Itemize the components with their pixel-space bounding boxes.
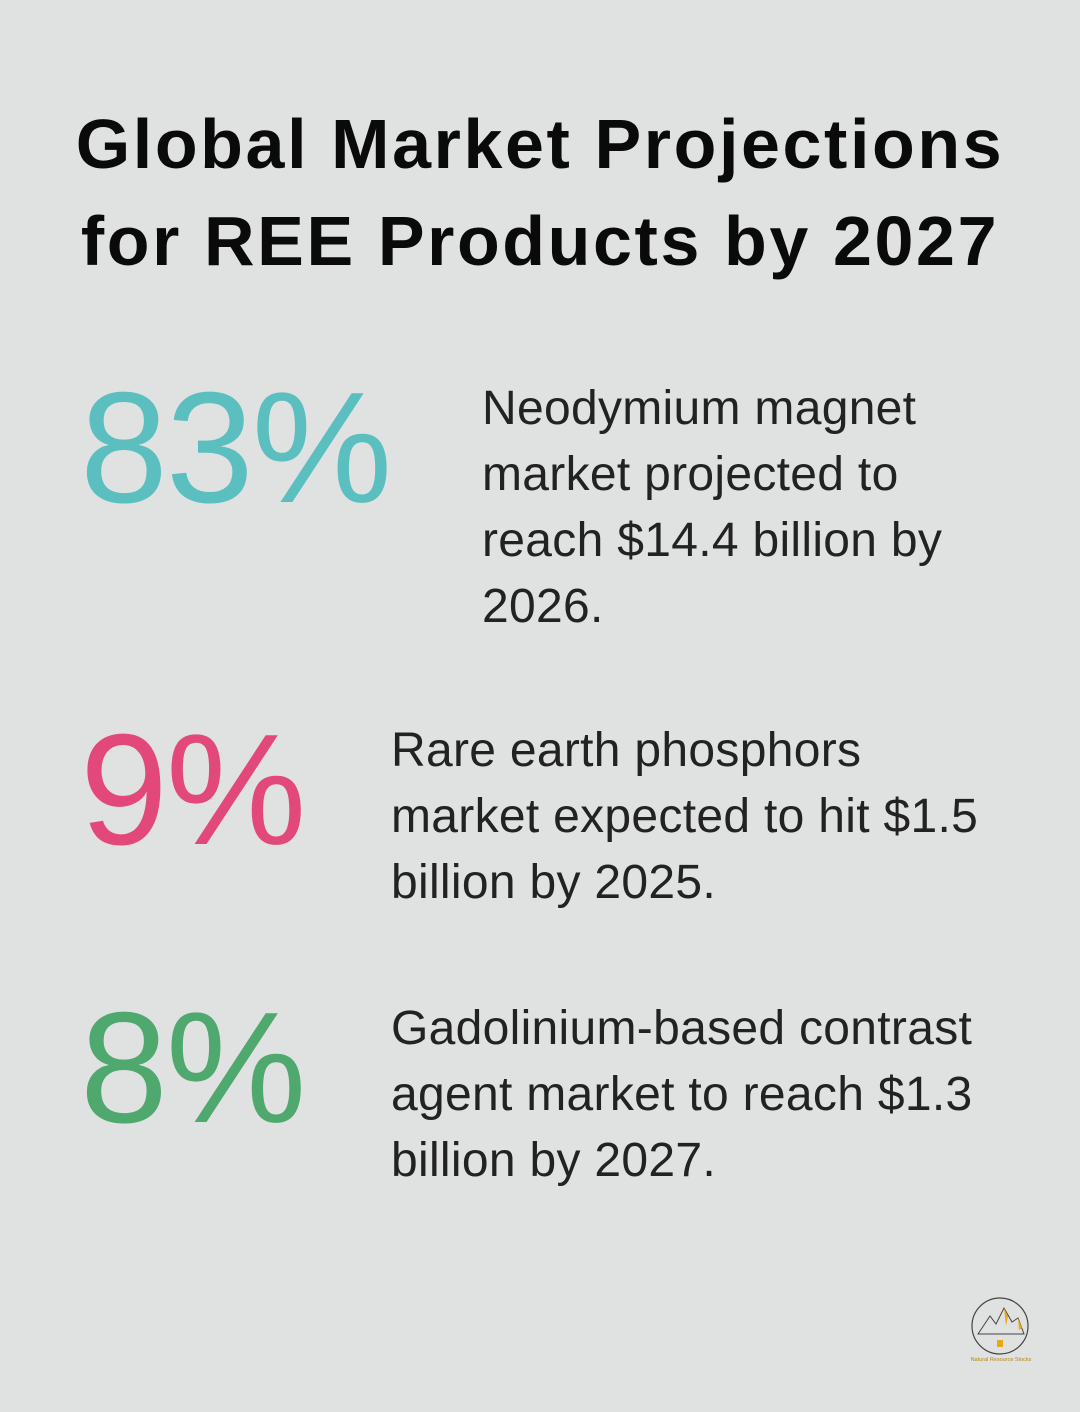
number 9%: 9% [80, 702, 304, 878]
description 3: Gadolinium-based contrast agent market to reach $1.3 billion by 2027. [391, 1002, 972, 1187]
stat 1 [80, 360, 942, 633]
logo [971, 1297, 1032, 1363]
stat 3 [80, 980, 972, 1187]
number 8%: 8% [80, 980, 304, 1156]
stat 2 [80, 702, 978, 909]
title: for REE Products by 2027 [81, 202, 999, 280]
title: Global Market Projections [76, 105, 1004, 183]
title [76, 105, 1004, 280]
description 1: Neodymium magnet market projected to reach $14.4 billion by 2026. [482, 382, 942, 633]
number 83%: 83% [80, 360, 390, 536]
description 2: Rare earth phosphors market expected to hit $1.5 billion by 2025. [391, 724, 978, 909]
logo: Natural Resource Stocks [971, 1357, 1032, 1363]
